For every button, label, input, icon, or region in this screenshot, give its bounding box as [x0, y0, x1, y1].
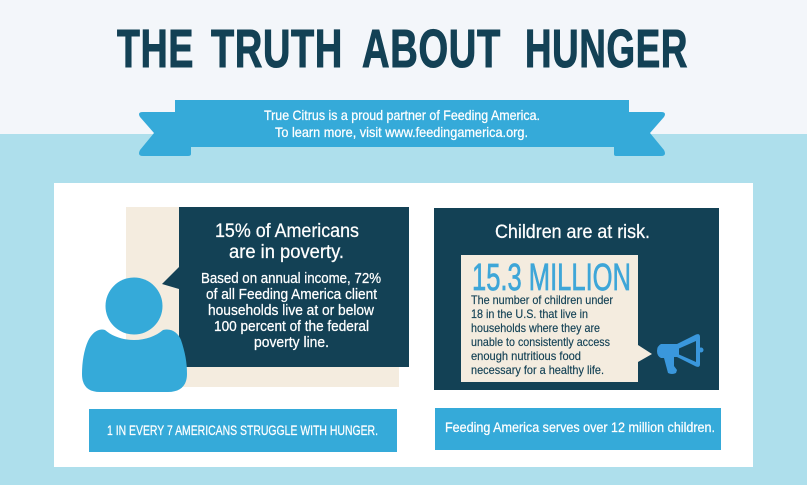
stat bar: 1 in 7: 1 IN EVERY 7 AMERICANS STRUGGLE WITH HUNGER.: [107, 422, 378, 438]
panel: poverty: [82, 207, 409, 452]
stat bar: 12 million: [435, 408, 721, 450]
callout: poverty text box: [162, 207, 409, 367]
callout: poverty text box: 100 percent of the federal: [214, 318, 369, 335]
ribbon banner: True Citrus is a proud partner of Feeding America.: [264, 107, 540, 123]
callout: 15.3 million: necessary for a healthy life.: [471, 363, 604, 377]
ribbon banner: [139, 100, 665, 156]
callout: poverty text box: households live at or below: [208, 302, 374, 319]
callout: poverty text box: poverty line.: [254, 334, 329, 351]
callout: 15.3 million: unable to consistently access: [471, 335, 610, 349]
callout: 15.3 million: [461, 255, 652, 382]
callout: 15.3 million: enough nutritious food: [471, 349, 581, 363]
icon: megaphone: [657, 334, 704, 374]
ribbon banner: To learn more, visit www.feedingamerica.org.: [275, 124, 528, 140]
stat bar: 1 in 7: [89, 409, 397, 452]
title: [117, 19, 688, 79]
title: TRUTH: [211, 19, 343, 79]
title: HUNGER: [525, 19, 688, 79]
title: ABOUT: [362, 19, 501, 79]
callout: 15.3 million: 15.3 MILLION: [472, 257, 631, 299]
heading: children: Children are at risk.: [495, 222, 650, 243]
callout: 15.3 million: 18 in the U.S. that live in: [471, 307, 588, 321]
panel: white card: [54, 183, 753, 467]
title: THE: [117, 19, 194, 79]
callout: 15.3 million: The number of children under: [471, 293, 613, 307]
callout: poverty text box: Based on annual income, 72%: [201, 270, 381, 287]
icon: person: [82, 278, 187, 392]
callout: poverty text box: of all Feeding America client: [206, 286, 378, 303]
callout: 15.3 million: households where they are: [471, 321, 600, 335]
callout: poverty text box: are in poverty.: [229, 242, 344, 263]
panel: children at risk: [434, 208, 721, 450]
stat bar: 12 million: Feeding America serves over 12 million children.: [445, 419, 715, 435]
callout: poverty text box: 15% of Americans: [215, 221, 359, 242]
